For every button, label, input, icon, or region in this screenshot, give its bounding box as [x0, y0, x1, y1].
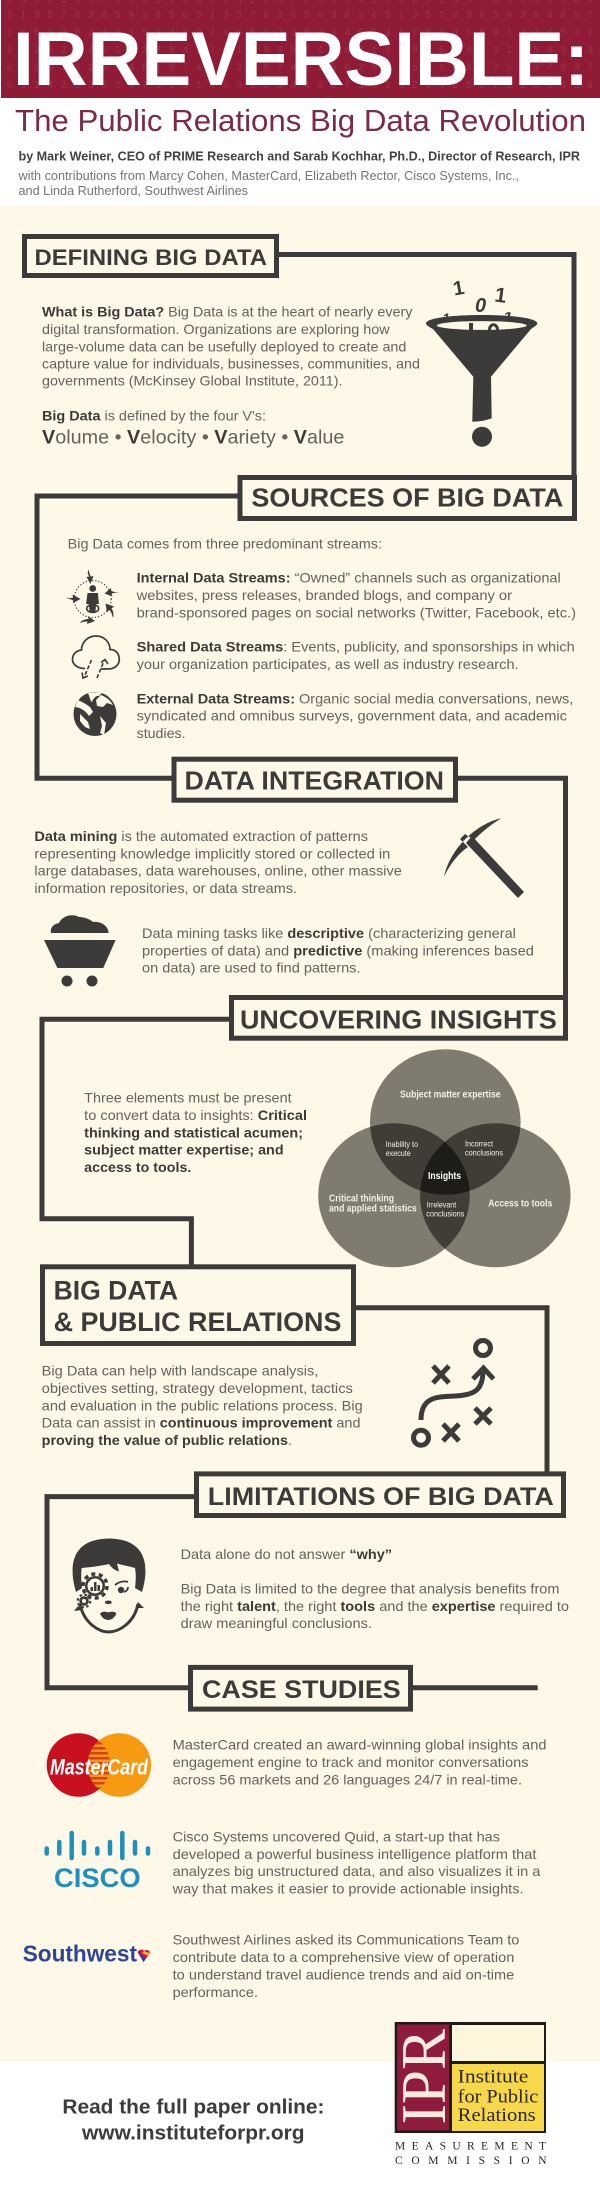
text block: big data in PR: Data can assist in continuous improvement and [42, 1415, 360, 1431]
venn diagram: Inability to [386, 1140, 418, 1149]
icon: face with gears [73, 1538, 145, 1632]
text block: what is big data: What is Big Data? Big Data is at the heart of nearly every [42, 304, 412, 320]
text block: data mining [34, 828, 402, 896]
text block: data mining tasks: properties of data) and predictive (making inferences based [142, 942, 534, 958]
heading: data integration: DATA INTEGRATION [184, 767, 444, 795]
text block: big data in PR: Big Data can help with landscape analysis, [42, 1363, 318, 1379]
text block: streams intro: Big Data comes from three predominant streams: [68, 535, 382, 551]
text block: three elements: access to tools. [84, 1159, 191, 1175]
text block: four Vs: Big Data is defined by the four V's: [42, 408, 266, 424]
icon: pickaxe [444, 818, 524, 898]
text block: Cisco: developed a powerful business intelligence platform that [173, 1846, 537, 1862]
text block: shared data streams [137, 639, 575, 672]
icon: funnel with binary digits: 1 [502, 309, 514, 328]
panel: case studies [23, 1667, 546, 2000]
heading: uncovering insights: UNCOVERING INSIGHTS [240, 1006, 557, 1034]
header banner [1, 0, 600, 102]
logo: MasterCard: MasterCard [50, 1754, 148, 1779]
text block: four Vs [42, 408, 344, 448]
connector: sources to data integration [37, 496, 238, 778]
text block: Cisco: Cisco Systems uncovered Quid, a start-up that has [173, 1828, 500, 1844]
logo: Cisco: CISCO [54, 1863, 141, 1893]
text block: MasterCard [173, 1737, 546, 1788]
venn diagram: conclusions [465, 1148, 503, 1158]
text block: limitations: draw meaningful conclusions. [181, 1615, 372, 1631]
panel: big data and public relations [42, 1267, 493, 1448]
text block: big data in PR [42, 1363, 363, 1448]
panel: data integration [34, 759, 534, 986]
text block: internal data streams [136, 570, 576, 620]
text block: what is big data: large-volume data can be usefully deployed to create and [42, 338, 406, 354]
logo: Institute for Public Relations Measurement Commission: Institute [458, 2067, 528, 2087]
heading: big data and public relations: & PUBLIC RELATIONS [54, 1307, 341, 1337]
venn diagram: conclusions [426, 1210, 464, 1219]
text block: three elements: thinking and statistical acumen; [84, 1124, 303, 1140]
text block: Cisco: analyzes big unstructured data, and also visualizes it in a [173, 1863, 541, 1879]
icon: internal data streams [65, 570, 120, 624]
text block: three elements: subject matter expertise; and [84, 1142, 284, 1158]
heading: limitations of big data: LIMITATIONS OF BIG DATA [208, 1483, 554, 1511]
icon: funnel with binary digits [426, 277, 537, 447]
venn diagram: and applied statistics [329, 1204, 417, 1215]
subtitle: The Public Relations Big Data Revolution [15, 103, 586, 138]
logo: Institute for Public Relations Measurement Commission: Relations [458, 2106, 536, 2126]
text block: external data streams: studies. [137, 725, 186, 741]
text block: what is big data: capture value for individuals, businesses, communities, and [42, 355, 420, 371]
text block: what is big data [42, 304, 420, 389]
authors and contributors: and Linda Rutherford, Southwest Airlines [18, 184, 248, 198]
header banner: 6 5 3 4 2 6 3 8 2 4 7 5 3 9 1 4 6 3 2 5 3 4 4 6 8 7 3 5 1 9 2 6 4 8 5 3 7 2 1 6 9 4 3 8 [7, 80, 593, 91]
text block: data mining tasks: Data mining tasks like descriptive (characterizing general [142, 925, 516, 941]
heading: sources of big data: SOURCES OF BIG DATA [251, 485, 563, 513]
text block: Southwest [173, 1932, 520, 2000]
footer call to action: Read the full paper online: [62, 2095, 325, 2118]
text block: data mining: large databases, data warehouses, online, other massive [34, 863, 402, 879]
panel: defining big data [24, 236, 537, 448]
header banner: 6 4 1 8 7 3 2 5 9 4 6 1 8 7 4 6 5 2 3 8 7 4 1 9 5 6 2 8 3 7 5 4 1 6 8 3 7 5 9 3 7 8 3 7 [7, 62, 593, 74]
text block: Southwest: Southwest Airlines asked its Communications Team to [173, 1932, 520, 1948]
text block: limitations: Data alone do not answer “why” [181, 1546, 392, 1562]
logo: Institute for Public Relations Measurement Commission: COMMISSION [395, 2155, 547, 2167]
connector: limitations to case studies [47, 1497, 195, 1688]
text block: shared data streams: Shared Data Streams : Events, publicity, and sponsorships in which [137, 639, 575, 655]
header banner: 5 8 3 5 2 7 4 6 1 9 3 8 5 4 2 7 6 1 3 9 8 5 2 4 7 6 3 1 9 5 8 2 6 5 4 7 3 1 8 5 4 9 6 3 [7, 45, 593, 56]
text block: big data in PR: and evaluation in the public relations process. Big [42, 1397, 363, 1413]
logo: Institute for Public Relations Measurement Commission [388, 2022, 547, 2167]
text block: Southwest: contribute data to a comprehensive view of operation [173, 1949, 514, 1965]
text block: limitations: the right talent, the right tools and the expertise required to [181, 1598, 569, 1614]
panel: limitations of big data [73, 1474, 569, 1632]
logo: MasterCard [47, 1733, 151, 1797]
header banner: 5 1 3 5 7 8 3 6 5 9 3 8 3 6 5 1 3 5 7 8 3 6 5 9 3 8 3 6 5 1 3 5 7 8 3 6 5 9 3 8 4 8 9 7 [7, 10, 593, 21]
venn diagram: Critical thinking [329, 1193, 394, 1204]
venn diagram: Incorrect [465, 1140, 494, 1148]
venn diagram: Insights [428, 1170, 461, 1182]
logo: Institute for Public Relations Measurement Commission: MEASUREMENT [395, 2140, 546, 2152]
text block: what is big data: digital transformation. Organizations are exploring how [42, 321, 391, 337]
icon: external data streams globe [74, 692, 116, 736]
text block: limitations [181, 1546, 569, 1631]
text block: MasterCard: MasterCard created an award-winning global insights and [173, 1737, 546, 1753]
connector: case studies tail [411, 1685, 538, 1690]
authors and contributors: with contributions from Marcy Cohen, MasterCard, Elizabeth Rector, Cisco Systems, Inc., [17, 169, 519, 183]
text block: Cisco [172, 1828, 541, 1897]
text block: internal data streams: websites, press releases, branded blogs, and company or [136, 587, 512, 603]
text block: MasterCard: engagement engine to track and monitor conversations [173, 1754, 528, 1770]
heading: case studies: CASE STUDIES [202, 1676, 401, 1704]
text block: Southwest: performance. [173, 1984, 258, 2000]
text block: internal data streams: brand-sponsored pages on social networks (Twitter, Facebook, etc.) [137, 604, 576, 620]
icon: mine cart with ore [44, 915, 116, 986]
text block: MasterCard: across 56 markets and 26 languages 24/7 in real-time. [173, 1772, 522, 1788]
venn diagram: Irrelevant [427, 1201, 457, 1210]
heading: big data and public relations [42, 1267, 354, 1344]
panel: sources of big data [65, 478, 576, 741]
panel: uncovering insights [84, 998, 571, 1267]
logo: Cisco [47, 1833, 148, 1893]
connector: data integration to uncovering insights [456, 778, 566, 996]
footer call to action: www.instituteforpr.org [81, 2121, 305, 2144]
icon: funnel with binary digits: 1 [493, 284, 508, 308]
heading: defining big data [24, 236, 276, 276]
text block: Southwest: to understand travel audience trends and aid on-time [173, 1966, 515, 1982]
heading: limitations of big data [196, 1474, 564, 1516]
text block: data mining tasks [142, 925, 534, 976]
header banner: 3 6 5 9 3 8 2 4 7 1 5 6 3 8 9 2 4 6 5 1 7 3 8 2 9 4 6 5 3 1 7 8 2 4 6 5 9 1 3 7 6 5 3 2 [7, 28, 593, 38]
logo: Southwest: Southwest [23, 1941, 137, 1967]
authors and contributors [17, 148, 581, 198]
text block: data mining: Data mining is the automated extraction of patterns [34, 828, 368, 844]
venn diagram: Subject matter expertise [400, 1089, 501, 1100]
heading: sources of big data [240, 478, 574, 518]
connector: big data and PR to limitations [354, 1308, 547, 1472]
text block: limitations: Big Data is limited to the degree that analysis benefits from [181, 1580, 560, 1596]
text block: big data in PR: proving the value of public relations . [42, 1432, 292, 1448]
authors and contributors: by Mark Weiner, CEO of PRIME Research and Sarab Kochhar, Ph.D., Director of Research, IPR [18, 148, 581, 164]
text block: data mining: representing knowledge implicitly stored or collected in [34, 845, 390, 861]
text block: internal data streams: Internal Data Streams: “Owned” channels such as organizational [137, 570, 561, 586]
heading: uncovering insights [232, 998, 566, 1038]
heading: case studies [190, 1667, 410, 1709]
text block: what is big data: governments (McKinsey Global Institute, 2011). [42, 373, 342, 389]
text block: shared data streams: your organization participates, as well as industry research. [137, 656, 519, 672]
text block: three elements: to convert data to insights: Critical [84, 1107, 307, 1123]
venn diagram: execute [386, 1149, 411, 1158]
venn diagram [318, 1049, 571, 1267]
text block: four Vs: Volume • Velocity • Variety • Value [42, 427, 344, 448]
heading: big data and public relations: BIG DATA [54, 1275, 178, 1305]
footer call to action [62, 2095, 325, 2144]
title: IRREVERSIBLE: [13, 17, 589, 102]
logo: Institute for Public Relations Measurement Commission: IPR [388, 2029, 459, 2124]
venn diagram: Access to tools [488, 1199, 553, 1210]
text block: big data in PR: objectives setting, strategy development, tactics [42, 1380, 353, 1396]
text block: three elements: Three elements must be present [84, 1090, 292, 1106]
text block: data mining tasks: on data) are used to find patterns. [142, 960, 360, 976]
logo: Institute for Public Relations Measurement Commission: for Public [458, 2087, 538, 2107]
text block: external data streams: External Data Streams: Organic social media conversations, news, [137, 690, 573, 706]
icon: funnel with binary digits: 1 [443, 310, 451, 326]
text block: external data streams: syndicated and omnibus surveys, government data, and academic [137, 708, 567, 724]
text block: Cisco: way that makes it easier to provide actionable insights. [172, 1881, 524, 1897]
text block: external data streams [137, 690, 573, 741]
icon: funnel with binary digits: 1 [451, 277, 466, 301]
connector: uncovering insights to big data and PR [42, 1019, 230, 1265]
icon: funnel with binary digits: 0 [475, 295, 486, 317]
text block: three elements [84, 1090, 307, 1175]
icon: shared data streams cloud [72, 636, 119, 678]
icon: strategy play diagram [414, 1340, 494, 1445]
text block: data mining: information repositories, or data streams. [34, 880, 297, 896]
heading: defining big data: DEFINING BIG DATA [34, 245, 267, 270]
connector: defining to sources [277, 254, 574, 476]
heading: data integration [174, 759, 456, 800]
